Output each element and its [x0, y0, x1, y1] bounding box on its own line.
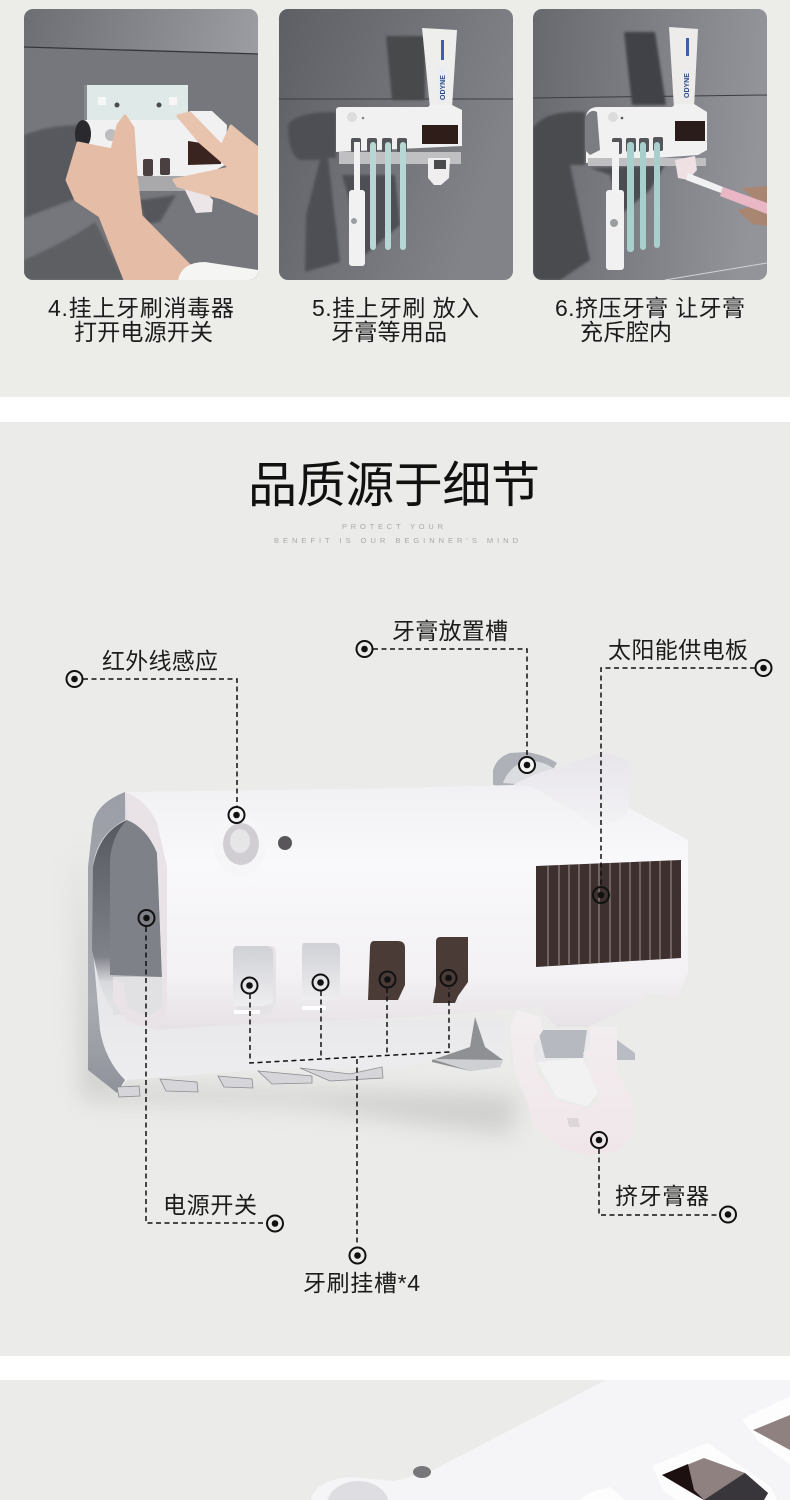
callout: brush slots label — [303, 1248, 420, 1296]
callout: solar panel label — [608, 637, 772, 676]
panel: bottom close-up background — [0, 1380, 790, 1500]
product close-up: angled sterilizer — [311, 1380, 790, 1500]
caption: step 4: 打开电源开关 — [74, 319, 213, 345]
toothbrush hooks — [117, 1067, 383, 1097]
callout: solar panel label: 太阳能供电板 — [608, 637, 748, 663]
panel: installation steps background — [0, 0, 790, 397]
toothpaste holder — [493, 752, 557, 790]
toothpaste funnel — [513, 752, 632, 828]
callout: toothpaste holder label: 牙膏放置槽 — [392, 618, 508, 644]
indicator light — [278, 836, 292, 850]
callout: squeezer label: 挤牙膏器 — [615, 1183, 709, 1209]
caption: step 4 — [48, 295, 234, 345]
left end cap lip — [113, 792, 167, 1030]
subtitle — [274, 522, 519, 545]
wall shadow — [78, 840, 520, 1135]
callout: infrared sensing label — [66, 648, 218, 687]
solar panel — [536, 860, 681, 967]
photo: step 4 hands mounting the unit — [24, 9, 258, 280]
photo: step 5 brushes and toothpaste hung on the unit: ODYNE — [440, 75, 447, 100]
base support — [432, 1017, 503, 1071]
callout: power switch label — [163, 1192, 283, 1232]
close-up slot: right — [745, 1398, 790, 1462]
caption: step 4: 4.挂上牙刷消毒器 — [48, 295, 234, 321]
inner cavity — [92, 820, 162, 1015]
infrared sensor — [214, 814, 266, 876]
callout: squeezer label — [615, 1183, 736, 1222]
back plate — [88, 792, 506, 1093]
subtitle: BENEFIT IS OUR BEGINNER'S MIND — [274, 536, 519, 545]
caption: step 5: 牙膏等用品 — [331, 319, 447, 345]
caption: step 5: 5.挂上牙刷 放入 — [312, 295, 479, 321]
callout markers on product — [138, 757, 609, 1148]
callout: toothpaste holder label — [356, 618, 508, 657]
caption: step 6 — [555, 295, 745, 345]
back plate outer shell — [88, 792, 125, 1093]
caption: step 6: 6.挤压牙膏 让牙膏 — [555, 295, 745, 321]
callout lines: dashed leaders — [83, 649, 755, 1246]
photo: step 6 squeezing toothpaste onto a brush — [533, 9, 767, 280]
close-up slot: middle — [655, 1445, 775, 1500]
photo: step 5 brushes and toothpaste hung on the unit — [279, 9, 513, 280]
close-up sensor — [327, 1481, 389, 1500]
close-up slot: left — [580, 1487, 625, 1500]
main housing — [125, 785, 688, 1030]
panel: detail diagram background — [0, 422, 790, 1356]
toothpaste squeezer — [510, 1010, 635, 1156]
callout: power switch label: 电源开关 — [163, 1192, 257, 1218]
close-up indicator light — [413, 1466, 431, 1478]
caption: step 6: 充斥腔内 — [580, 319, 672, 345]
callout: infrared sensing label: 红外线感应 — [102, 648, 218, 674]
base behind squeezer — [510, 1030, 590, 1062]
subtitle: PROTECT YOUR — [342, 522, 444, 531]
photo: step 6 squeezing toothpaste onto a brush: ODYNE — [684, 73, 691, 98]
caption: step 5 — [312, 295, 479, 345]
toothbrush slots — [233, 937, 468, 1015]
title: 品质源于细节 — [248, 459, 540, 513]
product: toothbrush sterilizer — [78, 752, 688, 1156]
callout: brush slots label: 牙刷挂槽*4 — [303, 1270, 420, 1296]
